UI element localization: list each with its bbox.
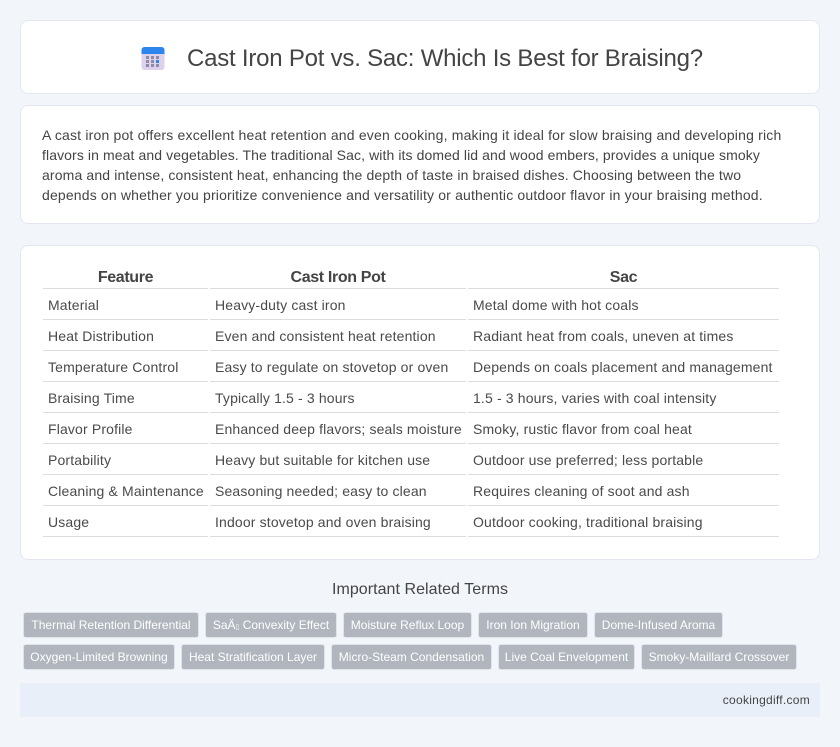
tag: Moisture Reflux Loop (351, 618, 464, 632)
text: Easy to regulate on stovetop or oven (215, 359, 448, 375)
footer bar (20, 683, 820, 717)
panel: intro (20, 105, 820, 224)
text: Seasoning needed; easy to clean (215, 483, 427, 499)
tag (205, 612, 337, 638)
tag (331, 644, 492, 670)
tag: Heat Stratification Layer (189, 650, 317, 664)
tag: Dome-Infused Aroma (602, 618, 715, 632)
intro text: A cast iron pot offers excellent heat retention and even cooking, making it ideal for slow braising and developing rich (42, 127, 781, 143)
text: Outdoor cooking, traditional braising (473, 514, 703, 530)
tag (498, 644, 635, 670)
heading: related terms: Important Related Terms (332, 581, 508, 598)
footer credit: cookingdiff.com (723, 693, 810, 707)
text: Outdoor use preferred; less portable (473, 452, 703, 468)
text: Radiant heat from coals, uneven at times (473, 328, 733, 344)
tag (641, 644, 797, 670)
text: Enhanced deep flavors; seals moisture (215, 421, 462, 437)
row: Usage: Usage (48, 514, 89, 530)
text: 1.5 - 3 hours, varies with coal intensity (473, 390, 716, 406)
tag (594, 612, 723, 638)
text: Requires cleaning of soot and ash (473, 483, 690, 499)
tag: Smoky-Maillard Crossover (649, 650, 789, 664)
tag: Micro-Steam Condensation (339, 650, 484, 664)
tag (478, 612, 588, 638)
icon: calendar (142, 47, 164, 70)
row: Temperature Control: Temperature Control (48, 359, 178, 375)
text: Heavy but suitable for kitchen use (215, 452, 430, 468)
text: Smoky, rustic flavor from coal heat (473, 421, 692, 437)
tag (343, 612, 472, 638)
intro text: flavors in meat and vegetables. The traditional Sac, with its domed lid and wood embers, provides a unique smoky (42, 147, 760, 163)
tag (23, 644, 175, 670)
text: Indoor stovetop and oven braising (215, 514, 431, 530)
row: Cleaning & Maintenance: Cleaning & Maintenance (48, 483, 204, 499)
comparison table (43, 288, 779, 537)
intro text: aroma and intense, consistent heat, enhancing the depth of taste in braised dishes. Choosing between the two (42, 167, 741, 183)
row: Heat Distribution: Heat Distribution (48, 328, 154, 344)
tag: Live Coal Envelopment (505, 650, 628, 664)
text: Depends on coals placement and management (473, 359, 773, 375)
tag: SaÄ▯ Convexity Effect (213, 618, 329, 632)
tag (181, 644, 325, 670)
title: Cast Iron Pot vs. Sac: Which Is Best for Braising? (187, 45, 703, 72)
table header: Cast Iron Pot: Cast Iron Pot (290, 269, 386, 286)
tag (23, 612, 199, 638)
row: Braising Time: Braising Time (48, 390, 135, 406)
table header: Sac: Sac (610, 269, 637, 286)
row: Portability: Portability (48, 452, 111, 468)
header panel (20, 20, 820, 94)
panel: comparison table (20, 245, 820, 560)
text: Metal dome with hot coals (473, 297, 639, 313)
tag: Iron Ion Migration (486, 618, 580, 632)
table header: Feature: Feature (98, 269, 153, 286)
row: Flavor Profile: Flavor Profile (48, 421, 133, 437)
intro text (42, 127, 781, 203)
text: Typically 1.5 - 3 hours (215, 390, 355, 406)
text: Heavy-duty cast iron (215, 297, 346, 313)
tag: Thermal Retention Differential (31, 618, 191, 632)
row: Material: Material (48, 297, 99, 313)
text: Even and consistent heat retention (215, 328, 436, 344)
tag: Oxygen-Limited Browning (30, 650, 168, 664)
intro text: depends on whether you prioritize convenience and versatility or authentic outdoor flavor in your braising method. (42, 187, 763, 203)
